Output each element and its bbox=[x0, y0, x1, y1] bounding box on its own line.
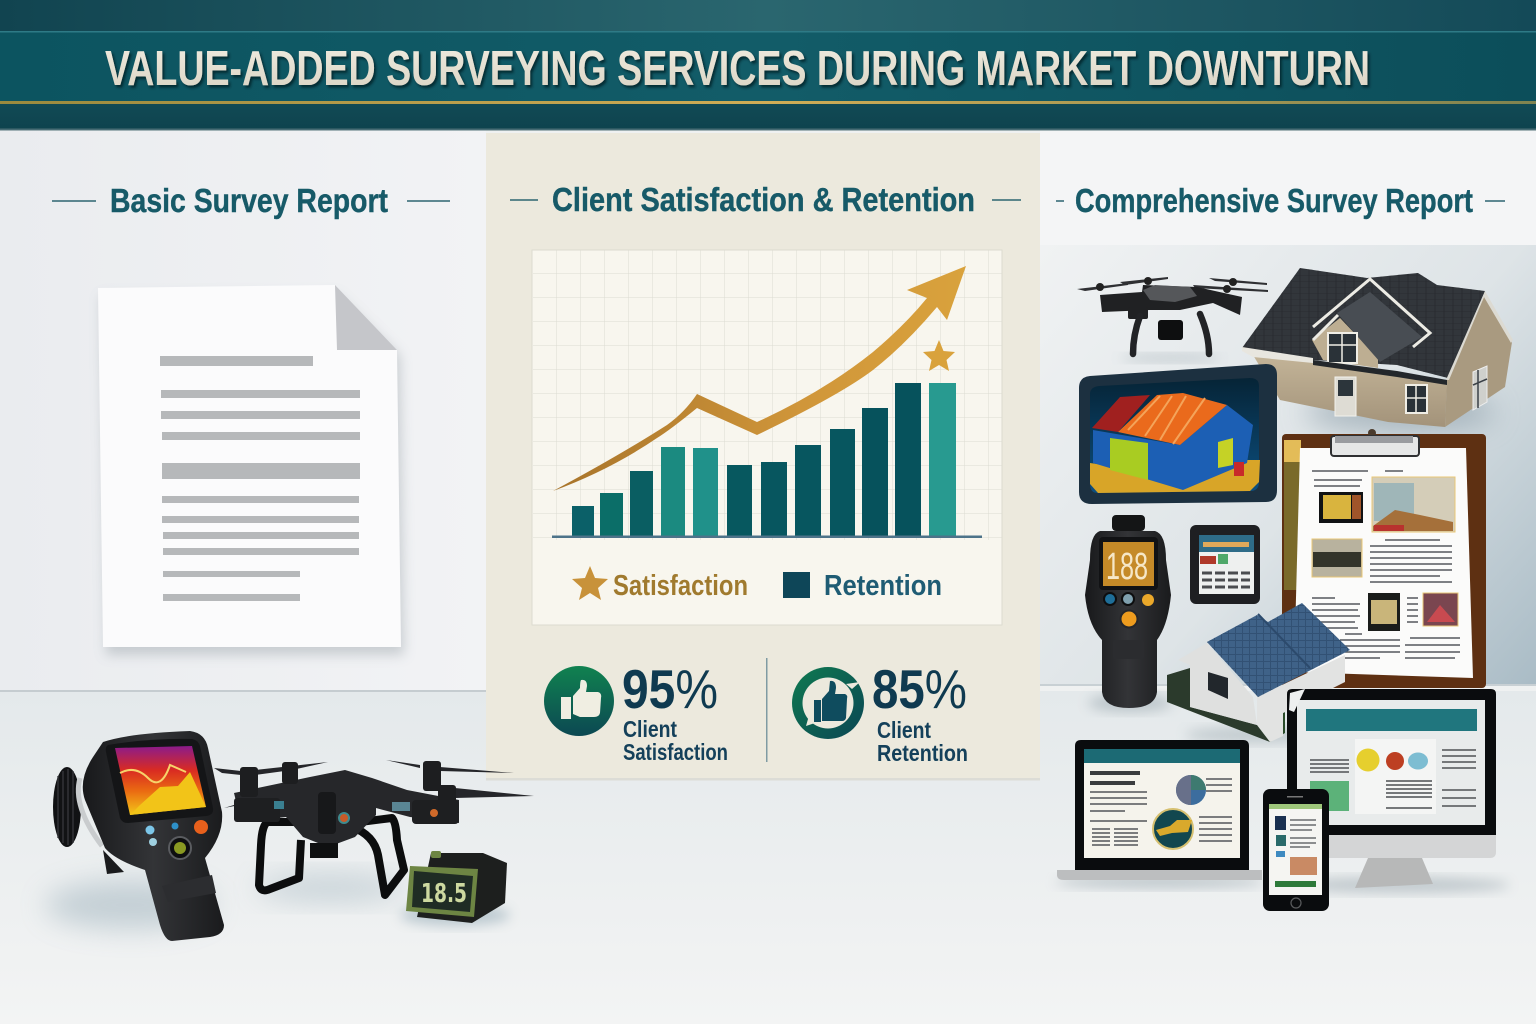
icon: survey drone bbox=[1077, 277, 1268, 362]
stat: 95 percent client satisfaction: 95% bbox=[622, 658, 718, 720]
stat: 85 percent client retention: Client bbox=[877, 717, 931, 743]
icon: laptop bbox=[1055, 740, 1265, 888]
icon: desktop monitor bbox=[1287, 689, 1510, 893]
icon: handheld thermal meter bbox=[1085, 515, 1172, 712]
icon: quadcopter drone bbox=[214, 760, 534, 900]
panel: client satisfaction and retention bbox=[510, 181, 1021, 766]
header banner bbox=[0, 0, 1536, 131]
icon: retention speech bubble thumbs up bbox=[792, 667, 864, 739]
trend arrow bbox=[553, 266, 966, 491]
icon: large house model bbox=[1242, 268, 1513, 432]
icon: thermal imaging camera bbox=[45, 731, 224, 941]
stat: 85 percent client retention: Retention bbox=[877, 740, 968, 766]
panel: basic survey report bbox=[45, 182, 534, 941]
icon: clipboard with report bbox=[1282, 429, 1486, 688]
legend: satisfaction: Satisfaction bbox=[613, 570, 748, 602]
stat: 95 percent client satisfaction bbox=[544, 658, 728, 765]
icon: thumbs up badge bbox=[544, 666, 614, 736]
reading 18.5: 18.5 bbox=[421, 879, 467, 909]
heading: basic survey report: Basic Survey Report bbox=[110, 182, 388, 219]
bar chart bbox=[552, 383, 982, 538]
icon: plain paper document bbox=[98, 285, 404, 655]
stat: 85 percent client retention: 85% bbox=[872, 658, 967, 720]
icon: small tablet bbox=[1190, 525, 1260, 604]
reading 188: 188 bbox=[1106, 546, 1148, 588]
icon: tablet with thermal house bbox=[1079, 364, 1277, 504]
stat: 95 percent client satisfaction: Client bbox=[623, 716, 677, 742]
legend: retention: Retention bbox=[824, 570, 942, 602]
icon: star marker bbox=[923, 340, 955, 371]
stat: 95 percent client satisfaction: Satisfaction bbox=[623, 739, 728, 765]
icon: smartphone bbox=[1263, 789, 1329, 911]
chart panel bbox=[532, 250, 1002, 625]
heading: client satisfaction and retention: Client Satisfaction & Retention bbox=[552, 181, 975, 218]
icon: laser distance meter bbox=[400, 851, 510, 926]
legend: satisfaction bbox=[572, 566, 748, 602]
legend: retention bbox=[783, 570, 942, 602]
icon: small house with blue roof bbox=[1167, 603, 1350, 743]
stat: 85 percent client retention bbox=[792, 658, 968, 766]
panel: comprehensive survey report bbox=[1055, 182, 1513, 911]
